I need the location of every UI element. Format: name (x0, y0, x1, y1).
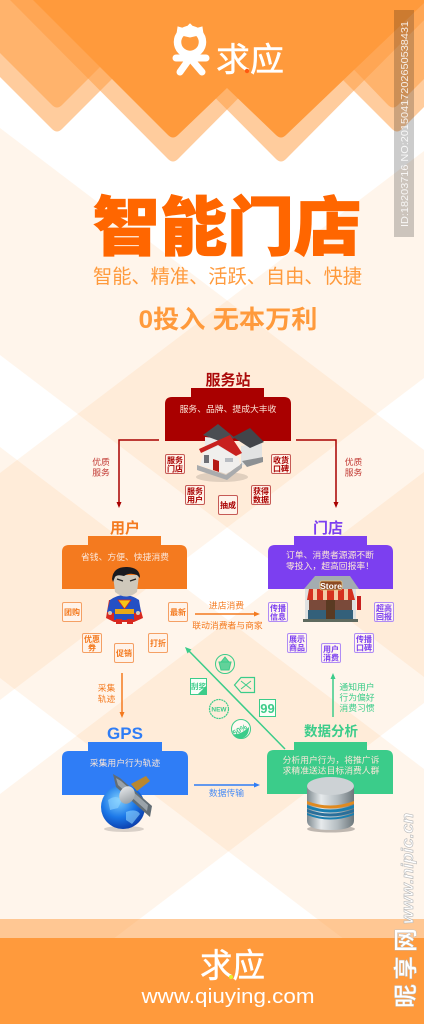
icon: store: Store (320, 581, 342, 591)
heading: 数据分析 (304, 723, 358, 739)
label: left quality service (92, 456, 110, 478)
panel text: 省钱、方便、快捷消费 (81, 551, 169, 562)
tag: 抽成: 抽成 (220, 500, 236, 510)
tag: 传播信息: 信息 (270, 612, 286, 622)
icon: scratch card (190, 678, 206, 694)
footer band (0, 919, 424, 1024)
id stamp (394, 10, 414, 237)
label: left quality service: 服务 (92, 466, 110, 478)
arrow: GPS to data analysis (194, 782, 260, 788)
tag: 优惠券: 优惠 (84, 634, 100, 644)
tag: 服务门店 (166, 454, 184, 474)
tag: 服务门店: 门店 (167, 464, 183, 474)
tag: 传播口碑: 传播 (356, 634, 372, 644)
tag: 最新 (168, 602, 188, 622)
icon: superhero (106, 567, 143, 624)
panel body (165, 388, 291, 441)
tag: 获得数据: 获得 (253, 486, 269, 496)
title: 智能门店 (93, 192, 361, 264)
tag: 获得数据 (252, 486, 270, 504)
watermark: 昵享网 (393, 928, 420, 1008)
tag: 促销: 促销 (116, 648, 132, 658)
icon: database (307, 777, 355, 832)
label: collect track: 轨迹 (98, 693, 115, 704)
tag: 打折 (148, 634, 168, 652)
heading: GPS (107, 724, 143, 743)
tag: 展示商品: 展示 (289, 635, 305, 644)
panel: service station (165, 371, 291, 514)
heading: 门店 (313, 519, 343, 537)
tag: 用户消费: 消费 (323, 652, 339, 662)
footer brand: 求应 (200, 947, 265, 984)
tag: 团购 (62, 602, 82, 622)
icon: mascot (176, 24, 206, 72)
icon: scissors coupon (234, 678, 254, 692)
tag: 服务用户: 服务 (187, 486, 203, 496)
panel body (62, 536, 187, 589)
watermark: www.nipic.cn (398, 813, 417, 924)
label: notify users (339, 681, 375, 713)
panel text: 分析用户行为，将推广诉 (283, 754, 380, 765)
icon: 50 percent: 50% (231, 722, 249, 737)
tag: 抽成 (218, 496, 238, 514)
icon: basket (216, 654, 234, 674)
tag: 收货口碑: 收货 (273, 455, 289, 465)
arrow: station to store (296, 440, 338, 508)
tag: 团购: 团购 (64, 607, 80, 617)
label: collect track: 采集 (98, 682, 115, 693)
tag: 传播信息 (268, 602, 288, 622)
panel text: 求精准送达目标消费人群 (283, 764, 380, 776)
panel: data analysis (267, 723, 393, 832)
tag: 优惠券: 券 (88, 642, 96, 652)
tag: 服务门店: 服务 (167, 455, 183, 465)
icon: new badge: NEW (211, 706, 227, 714)
panel body (62, 742, 188, 795)
tag: 用户消费 (322, 644, 340, 662)
logo: mascot and wordmark (176, 24, 284, 78)
id stamp: ID:18203716 NO:20150417202650538431 (399, 21, 411, 227)
heading: 服务站 (205, 371, 251, 389)
panel text (286, 549, 374, 571)
tag: 传播口碑 (354, 634, 374, 652)
label: notify users: 行为偏好 (339, 692, 375, 702)
wordmark: 求应 (216, 41, 284, 78)
tag: 服务用户: 用户 (187, 494, 203, 504)
tag: 传播口碑: 口碑 (356, 642, 372, 652)
footer url: www.qiuying.com (140, 986, 314, 1008)
icon: 99 tag: 99 (260, 701, 275, 716)
tag: 收货口碑 (272, 454, 290, 474)
panel text (283, 754, 380, 776)
tag: 获得数据: 数据 (253, 494, 269, 504)
label: store visit: 进店消费 (209, 600, 244, 610)
tag: 超高回报: 回报 (376, 612, 392, 622)
label: notify users: 消费习惯 (339, 702, 375, 713)
tag: 超高回报: 超高 (376, 603, 392, 613)
label: right quality service (345, 456, 362, 478)
icon: houses (196, 424, 264, 482)
label: left quality service: 优质 (92, 456, 110, 467)
label: right quality service: 服务 (345, 466, 362, 478)
tag: 传播信息: 传播 (270, 603, 286, 613)
panel text: 订单、消费者源源不断 (286, 549, 374, 560)
arrow: station to user (116, 440, 159, 508)
icon: globe and satellite (101, 774, 152, 832)
tag: 最新: 最新 (170, 607, 186, 617)
tag: 服务用户 (186, 486, 204, 504)
icon: store (303, 576, 361, 622)
tag: 超高回报 (374, 602, 394, 622)
label: collect track (98, 682, 115, 704)
panel text: 零投入，超高回报率！ (286, 560, 374, 571)
tag: 打折: 打折 (150, 638, 166, 648)
panel text: 采集用户行为轨迹 (90, 757, 160, 768)
panel: user (62, 519, 188, 662)
arrow: data analysis to user (185, 647, 285, 749)
panel body (268, 536, 393, 589)
icon: new badge (210, 700, 228, 718)
tag: 用户消费: 用户 (323, 644, 339, 654)
panel: GPS (62, 724, 188, 832)
panel body (267, 742, 393, 794)
icon: scratch card: 刮奖 (191, 681, 206, 691)
subtitle: 智能、精准、活跃、自由、快捷 (93, 266, 362, 288)
label: data transfer: 数据传输 (209, 787, 244, 798)
arrow: user to GPS (120, 673, 124, 718)
label: right quality service: 优质 (345, 456, 362, 467)
tag: 展示商品 (288, 634, 306, 652)
top zigzag banner (0, 0, 424, 162)
label: notify users: 通知用户 (339, 681, 375, 692)
tag: 促销 (114, 644, 134, 662)
arrow: user to store (195, 612, 260, 616)
watermark (393, 813, 420, 1008)
panel: store (268, 519, 394, 662)
slogan: 0投入 无本万利 (138, 306, 318, 334)
panel text: 服务、品牌、提成大丰收 (180, 403, 277, 414)
tag: 优惠券 (82, 634, 102, 652)
arrow: data analysis to store (330, 673, 336, 717)
tag: 展示商品: 商品 (289, 642, 305, 652)
label: linking consumers and merchants: 联动消费者与商家 (192, 620, 263, 630)
tag: 收货口碑: 口碑 (273, 464, 289, 474)
heading: 用户 (110, 519, 140, 537)
